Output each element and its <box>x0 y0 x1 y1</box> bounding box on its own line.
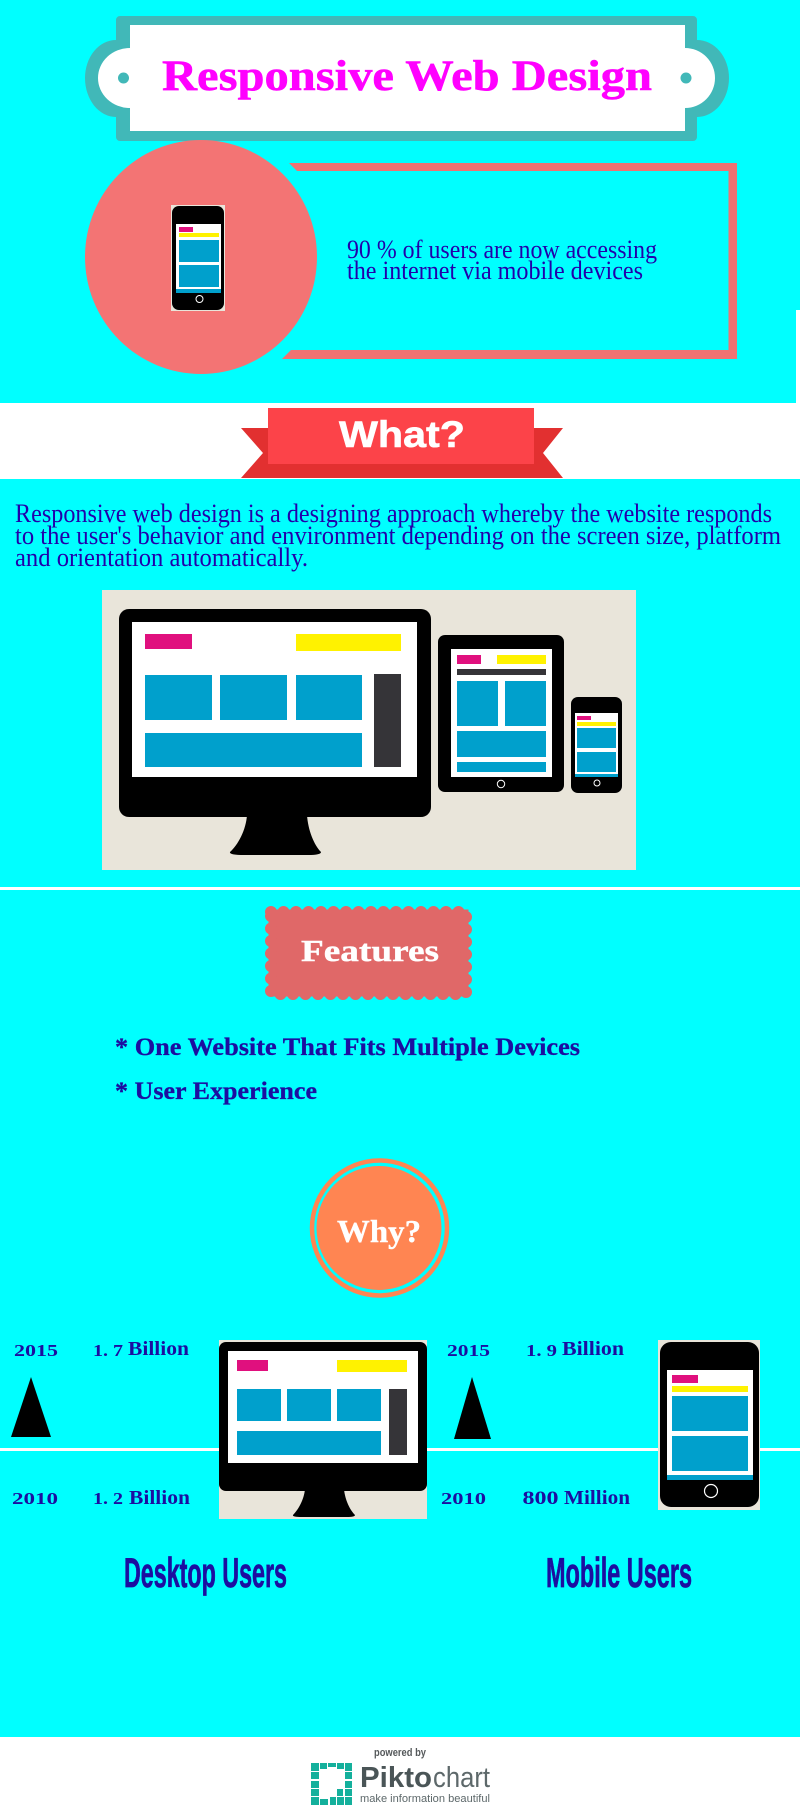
ribbon heading: What?: What? <box>339 414 465 455</box>
icon: smartphone <box>658 1340 760 1510</box>
definition paragraph <box>15 499 781 572</box>
icon: desktop monitor <box>119 609 431 855</box>
illustration: responsive devices <box>102 590 636 870</box>
icon: phone <box>571 697 622 793</box>
circle heading: Why?: Why? <box>337 1213 421 1249</box>
stat: 2015 desktop: 1. 7 <box>93 1341 124 1360</box>
stat: 2015 mobile: 2015 <box>447 1341 490 1360</box>
panel: desktop users <box>11 1338 427 1596</box>
icon: Piktochart logo <box>311 1763 352 1805</box>
stat: 2010 desktop: 2010 <box>12 1489 58 1508</box>
powered by: powered by <box>374 1747 427 1759</box>
feature list: * One Website That Fits Multiple Devices <box>115 1034 580 1061</box>
stat: 2015 desktop <box>14 1338 189 1360</box>
feature list <box>115 1034 580 1105</box>
panel: mobile statistic <box>85 140 737 374</box>
stat: 2010 mobile: 800 <box>522 1488 558 1509</box>
statistic text: 90 % of users are now accessing <box>347 235 657 264</box>
stat: 2010 desktop: 1. 2 <box>93 1489 123 1508</box>
icon: tablet <box>438 635 564 792</box>
footer: Piktochart branding <box>0 1737 800 1817</box>
statistic text: the internet via mobile devices <box>347 256 643 285</box>
bracket frame <box>282 163 737 359</box>
arrow: growth triangle <box>454 1377 491 1439</box>
definition paragraph: and orientation automatically. <box>15 543 308 572</box>
stat: 2015 desktop: Billion <box>128 1338 189 1360</box>
stat: 2015 mobile: 1. 9 <box>526 1341 557 1360</box>
stat: 2010 mobile: Million <box>564 1487 630 1509</box>
icon: desktop monitor <box>219 1340 427 1519</box>
arrow: growth triangle <box>11 1377 51 1437</box>
wordmark: chart <box>433 1762 490 1794</box>
title plaque <box>85 16 729 141</box>
feature list: * User Experience <box>115 1078 317 1105</box>
stat: 2010 desktop: Billion <box>129 1487 190 1509</box>
label: Mobile Users: Mobile Users <box>546 1549 692 1596</box>
wordmark: Pikto <box>360 1762 432 1794</box>
stat: 2015 desktop: 2015 <box>14 1341 58 1360</box>
stat: 2010 desktop <box>12 1487 190 1509</box>
stat: 2010 mobile <box>441 1487 630 1509</box>
badge heading: Features: Features <box>301 933 439 968</box>
badge heading: Features <box>271 912 466 994</box>
icon: smartphone <box>171 205 225 311</box>
ribbon heading: What? <box>241 408 563 478</box>
title: Responsive Web Design <box>162 53 652 100</box>
stat: 2010 mobile: 2010 <box>441 1489 486 1508</box>
stat: 2015 mobile <box>447 1338 624 1360</box>
wordmark <box>360 1762 490 1805</box>
wordmark: make information beautiful <box>360 1793 490 1805</box>
circle heading: Why? <box>312 1160 447 1296</box>
coral circle <box>85 140 317 374</box>
panel: mobile users <box>441 1338 760 1596</box>
statistic text <box>347 235 657 285</box>
label: Desktop Users: Desktop Users <box>124 1549 287 1596</box>
stat: 2015 mobile: Billion <box>562 1338 624 1360</box>
